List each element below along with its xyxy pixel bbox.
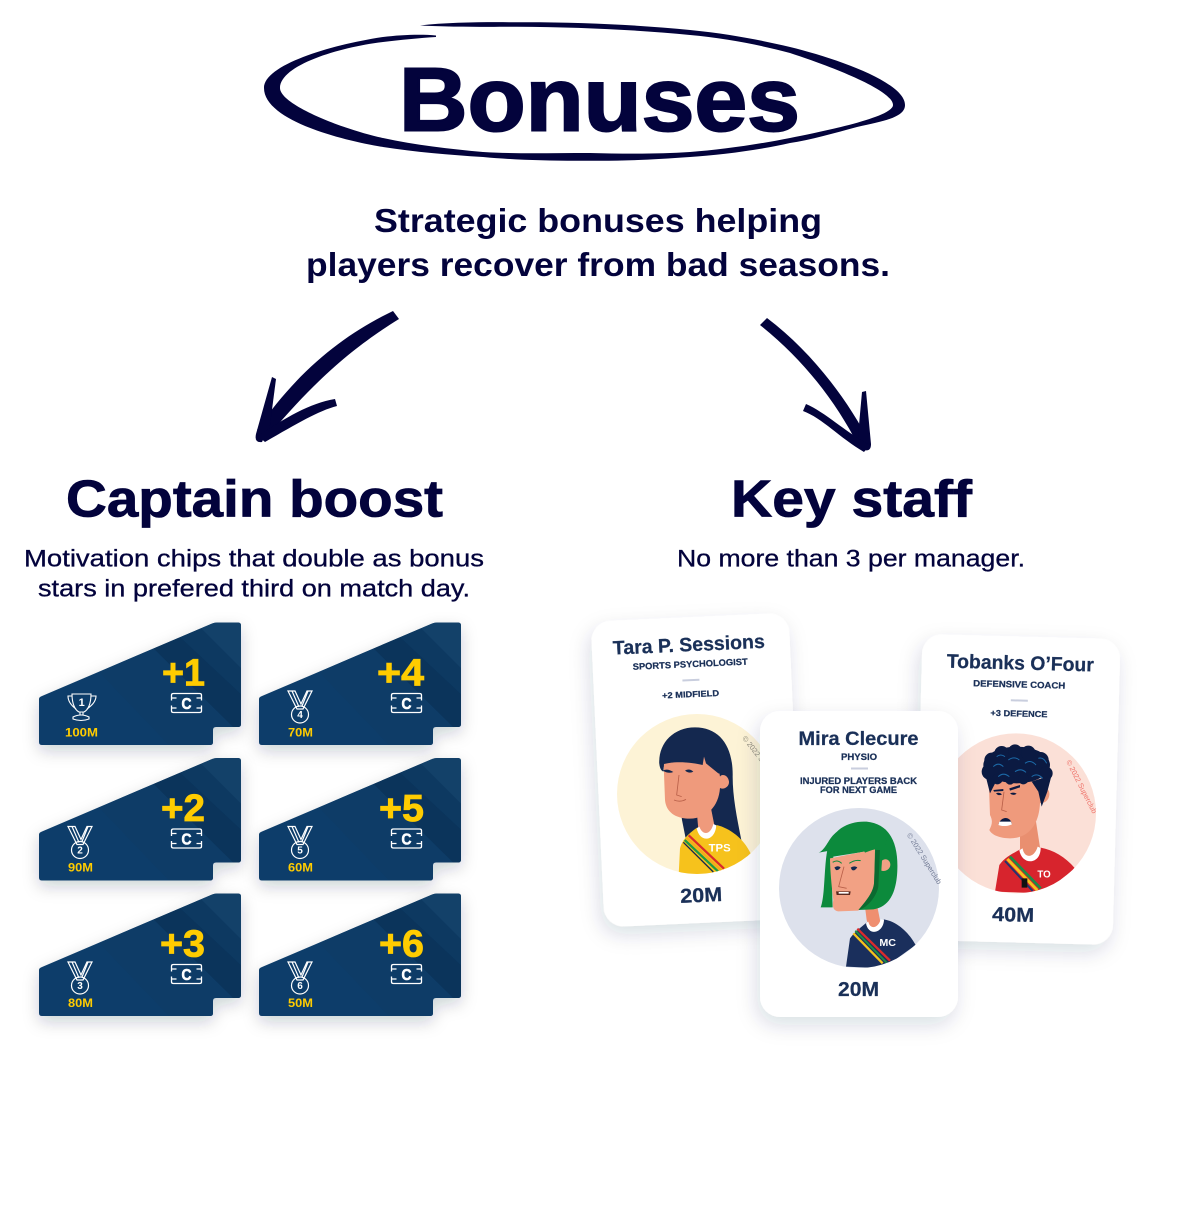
chip: +2 90M: 90M [68, 862, 93, 874]
portrait: Tara: TPS [709, 842, 731, 854]
chip: +6 50M: 50M [288, 998, 313, 1010]
text: key staff description: No more than 3 per manager. [677, 546, 1025, 572]
chip: +2 90M: 2 [77, 846, 83, 856]
arrow: to key staff [760, 318, 871, 452]
chip: +1 100M: 100M [65, 728, 98, 740]
staff card: Tara P. Sessions: 20M [680, 884, 723, 908]
chip: +3 80M: +3 [160, 924, 205, 966]
staff card: Tobanks O'Four [915, 634, 1120, 945]
chip: +1 100M: 1 [79, 697, 85, 709]
portrait: Tara: © 2022 Superclub [740, 734, 784, 786]
portrait: Tobanks [958, 733, 1096, 894]
chip: +4 70M: 4 [297, 710, 303, 721]
staff card: Mira Clecure: 20M [838, 979, 879, 1001]
chip: +5 60M: 5 [297, 846, 303, 856]
chip: +5 60M: 60M [288, 862, 313, 874]
staff card: Mira Clecure: Mira Clecure [798, 728, 919, 750]
staff card: Tobanks O'Four: DEFENSIVE COACH [973, 678, 1065, 691]
arrow: to captain boost [256, 311, 399, 442]
portrait: Tobanks: TO [1037, 869, 1051, 880]
subtitle: players recover from bad seasons. [306, 246, 890, 283]
staff card: Tara P. Sessions: +2 MIDFIELD [662, 688, 719, 700]
chip: +2 90M: +2 [161, 788, 205, 830]
chip: +4 70M: +4 [377, 652, 424, 694]
staff card: Tara P. Sessions: Tara P. Sessions [612, 631, 765, 660]
portrait: Tobanks: © 2022 Superclub [1064, 758, 1099, 815]
heading: key staff: Key staff [731, 470, 973, 528]
portrait: Mira: MC [879, 938, 896, 949]
staff card: Tobanks O'Four: Tobanks O’Four [947, 651, 1094, 676]
chip: +1 100M: +1 [162, 652, 205, 694]
portrait: Tara [617, 714, 760, 874]
title ellipse scribble [264, 22, 905, 161]
heading: captain boost: Captain boost [66, 470, 443, 528]
chip: +2 90M [39, 758, 241, 880]
chip: +6 50M [259, 893, 461, 1016]
subtitle [306, 202, 890, 283]
staff card: Mira Clecure: FOR NEXT GAME [820, 785, 897, 795]
chip: +5 60M [259, 758, 461, 880]
chip: +6 50M: +6 [379, 924, 424, 966]
staff card: Tobanks O'Four: 40M [992, 904, 1034, 927]
text: captain boost description: Motivation chips that double as bonus [24, 546, 484, 572]
staff card: Mira Clecure: PHYSIO [841, 752, 877, 762]
staff card: Tara P. Sessions [591, 613, 802, 927]
chip: +3 80M: 3 [77, 981, 83, 992]
portrait: Mira [779, 808, 944, 968]
staff card: Tara P. Sessions: SPORTS PSYCHOLOGIST [633, 657, 748, 672]
chip: +1 100M [39, 622, 241, 745]
chip: +5 60M: +5 [379, 788, 424, 830]
subtitle: Strategic bonuses helping [374, 202, 822, 239]
chip: +4 70M: 70M [288, 728, 313, 740]
title: Bonuses [399, 50, 800, 150]
chip: +3 80M [39, 893, 241, 1016]
chip: +6 50M: 6 [297, 981, 303, 992]
staff card: Mira Clecure [760, 711, 958, 1017]
staff card: Tobanks O'Four: +3 DEFENCE [990, 708, 1048, 719]
text: captain boost description: stars in prefered third on match day. [38, 576, 470, 602]
staff card: Mira Clecure: INJURED PLAYERS BACK [800, 776, 918, 786]
text: captain boost description [24, 546, 484, 602]
chip: +3 80M: 80M [68, 998, 93, 1010]
portrait: Mira: © 2022 Superclub [905, 831, 944, 886]
chip: +4 70M [259, 622, 461, 745]
